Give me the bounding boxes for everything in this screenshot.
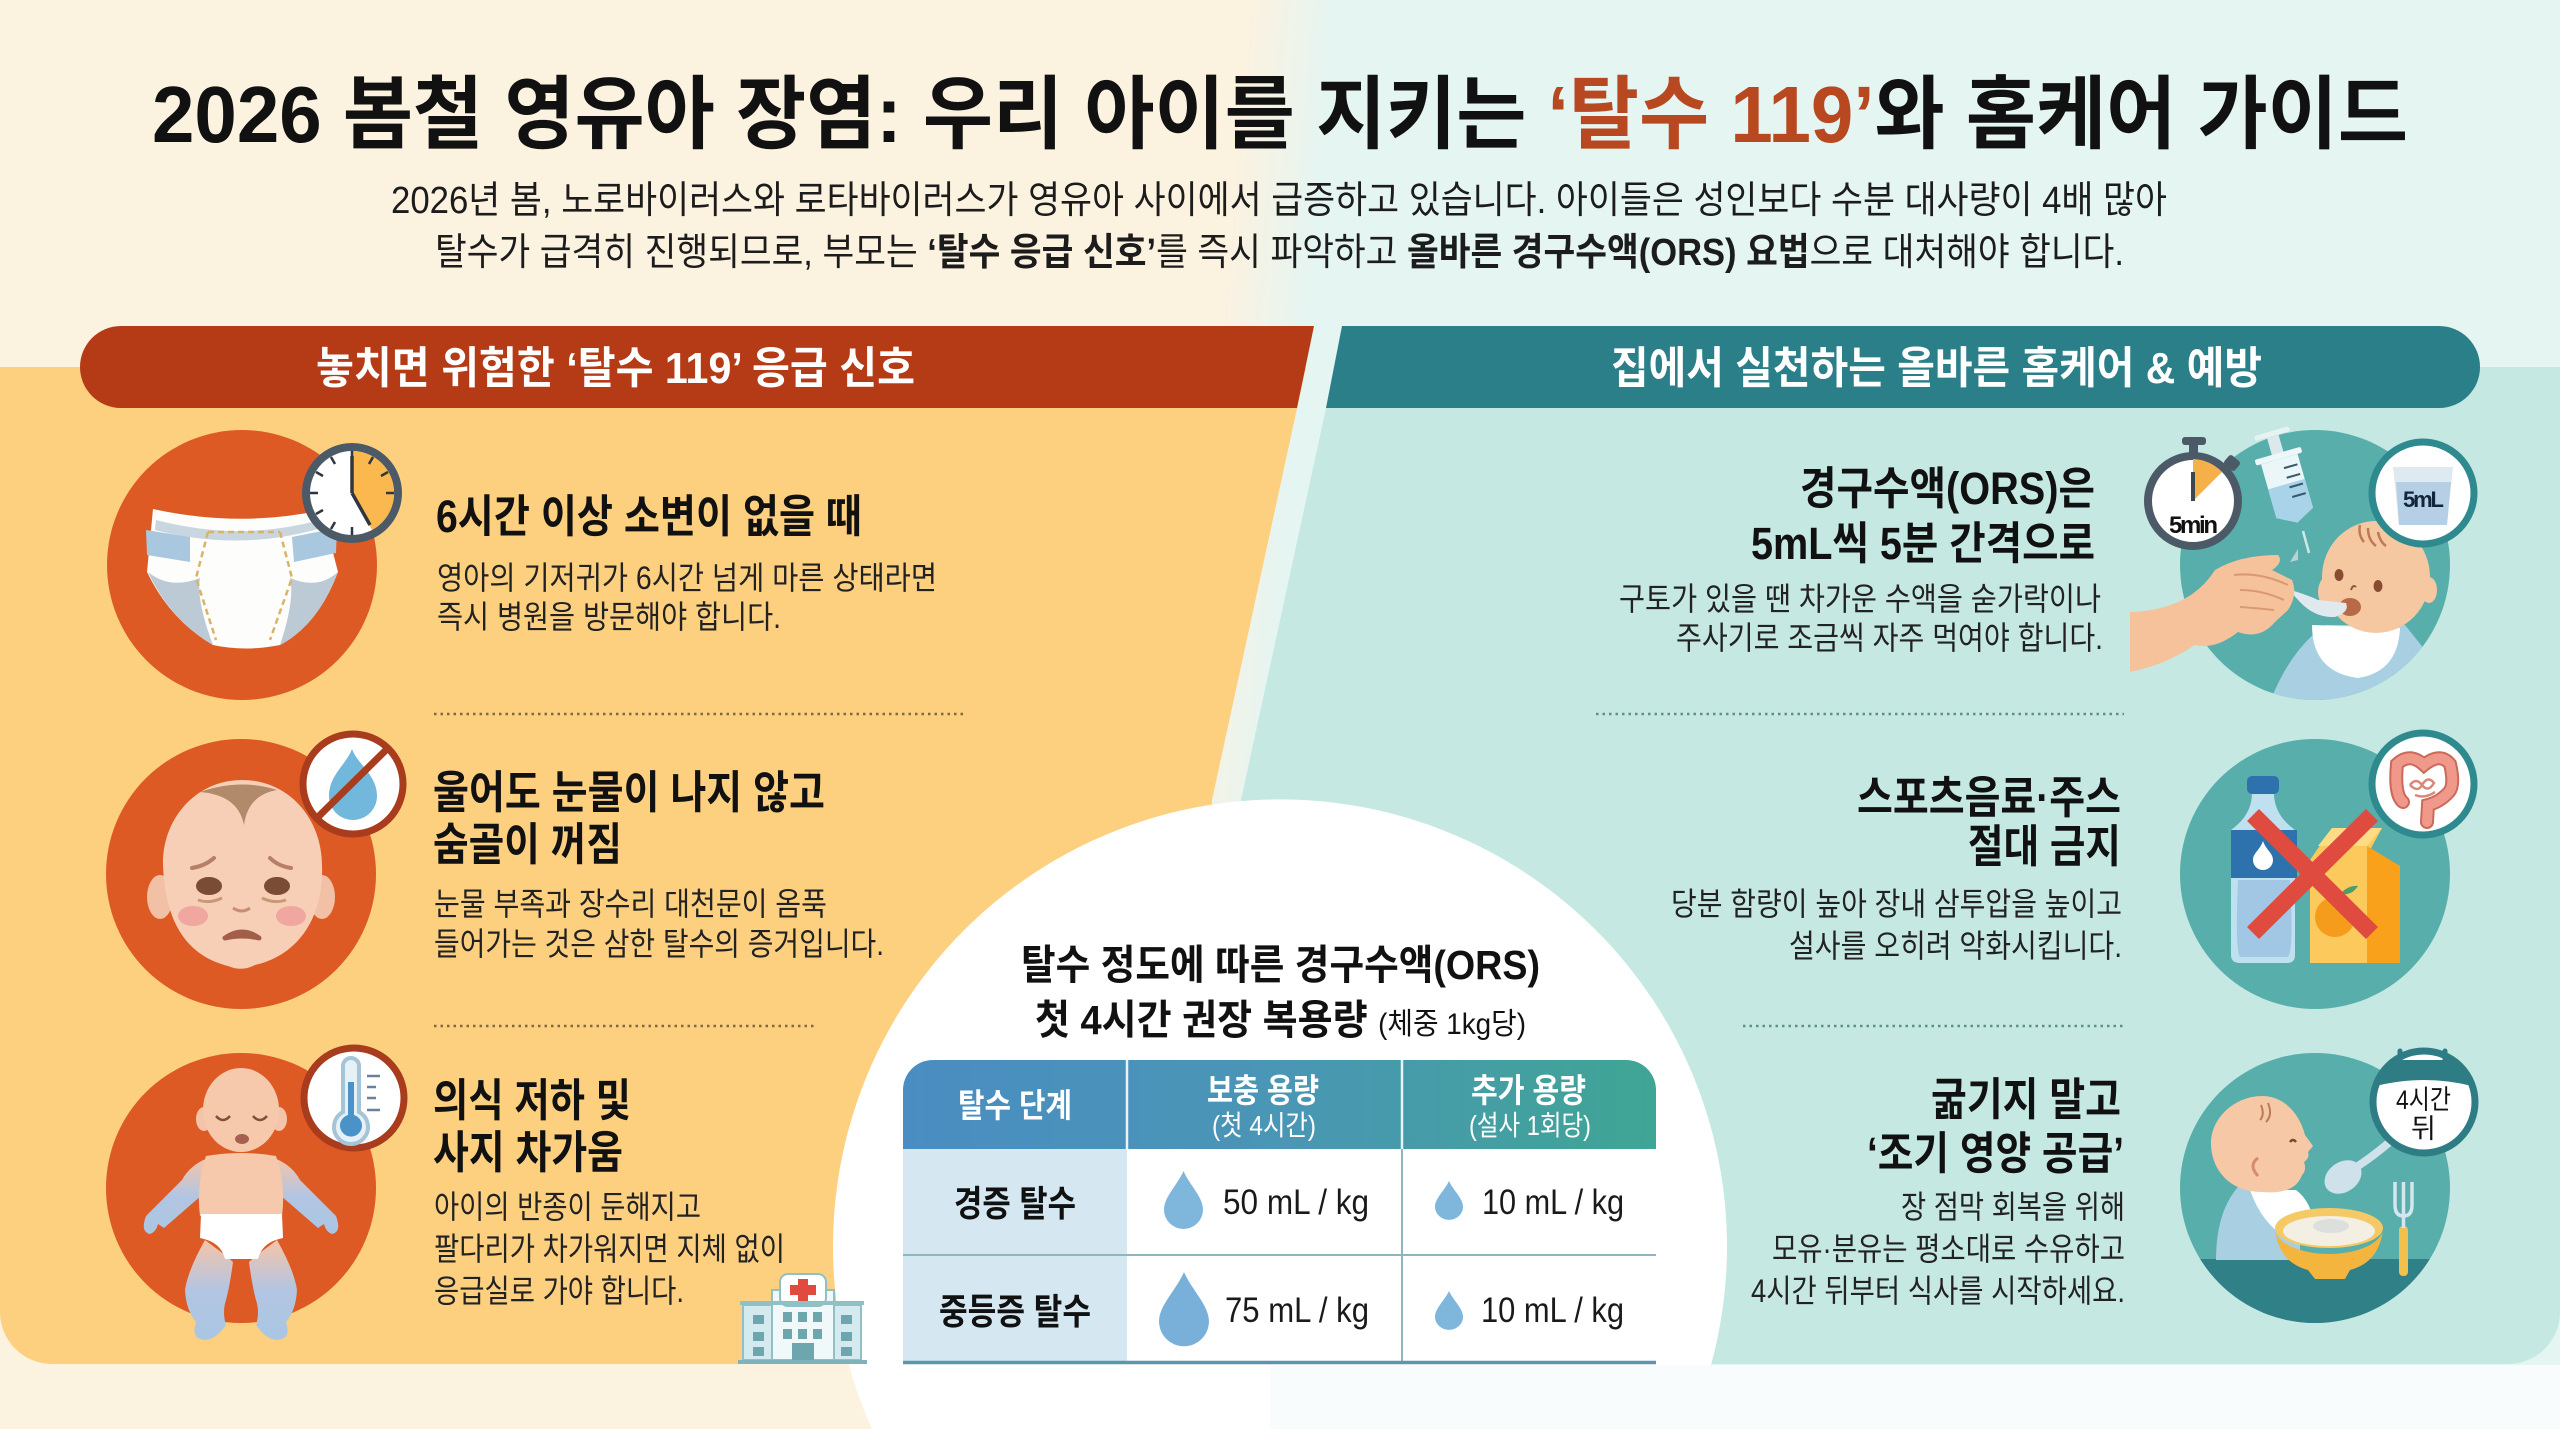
- table header row: 보충 용량: [1207, 1072, 1319, 1109]
- row: mild dehydration: 경증 탈수: [954, 1183, 1076, 1224]
- panel: danger signals: [0, 326, 1314, 1364]
- orange panel background: [0, 367, 1306, 1364]
- row: mild dehydration: 10 mL / kg: [1482, 1183, 1624, 1222]
- left section header: 놓치면 위험한 ‘탈수 119’ 응급 신호: [316, 344, 915, 393]
- heading: [1867, 1074, 2124, 1179]
- description: [434, 1189, 785, 1309]
- icon: baby eating porridge with calendar: 4시간: [2396, 1085, 2451, 1115]
- heading: 울어도 눈물이 나지 않고: [433, 767, 825, 818]
- heading: [1857, 772, 2121, 872]
- description: 4시간 뒤부터 식사를 시작하세요.: [1751, 1273, 2125, 1309]
- heading: 6시간 이상 소변이 없을 때: [436, 491, 862, 542]
- intro text: [391, 180, 2167, 274]
- table header row: 탈수 단계: [958, 1087, 1072, 1124]
- item: ORS dosing: [1619, 425, 2474, 710]
- description: 아이의 반종이 둔해지고: [434, 1189, 701, 1225]
- description: 주사기로 조금씩 자주 먹여야 합니다.: [1676, 620, 2103, 656]
- table heading: [1021, 942, 1540, 1043]
- table header row: (설사 1회당): [1469, 1110, 1591, 1141]
- description: [434, 886, 884, 962]
- heading: 경구수액(ORS)은: [1800, 463, 2095, 514]
- description: 팔다리가 차가워지면 지체 없이: [434, 1231, 785, 1267]
- panel: home care: [1241, 326, 2560, 1364]
- icon: hospital: [738, 1274, 867, 1364]
- item: early feeding: [1751, 1051, 2475, 1329]
- panel: ORS dose table: [833, 799, 2560, 1429]
- row: mild dehydration: 50 mL / kg: [1223, 1183, 1369, 1222]
- row: moderate dehydration: 중등증 탈수: [939, 1291, 1091, 1332]
- description: 즉시 병원을 방문해야 합니다.: [437, 599, 781, 635]
- icon: spoon feeding with stopwatch and cup: 5min: [2169, 512, 2218, 539]
- item: no sports drinks or juice: [1671, 733, 2474, 1009]
- right section header: [1326, 326, 2480, 408]
- description: 당분 함량이 높아 장내 삼투압을 높이고: [1671, 886, 2122, 922]
- description: 응급실로 가야 합니다.: [434, 1273, 684, 1309]
- heading: [1751, 463, 2095, 569]
- description: 구토가 있을 땐 차가운 수액을 숟가락이나: [1619, 581, 2101, 617]
- description: 영아의 기저귀가 6시간 넘게 마른 상태라면: [437, 560, 937, 596]
- description: [1671, 886, 2122, 964]
- heading: 5mL씩 5분 간격으로: [1751, 518, 2095, 569]
- dose table: [903, 1060, 1656, 1362]
- left section header: [80, 326, 1314, 408]
- heading: 절대 금지: [1968, 821, 2121, 872]
- description: 들어가는 것은 삼한 탈수의 증거입니다.: [434, 926, 884, 962]
- description: [1619, 581, 2103, 656]
- heading: 숨골이 꺼짐: [433, 819, 622, 870]
- heading: 스포츠음료·주스: [1857, 772, 2121, 823]
- white circle backdrop: [833, 799, 1727, 1429]
- row: mild dehydration: [954, 1171, 1624, 1229]
- title: 2026 봄철 영유아 장염: 우리 아이를 지키는 ‘탈수 119’와 홈케어 가이드: [152, 70, 2408, 159]
- icon: baby body with thermometer: [106, 1048, 404, 1340]
- heading: 사지 차가움: [433, 1127, 623, 1178]
- description: [1751, 1189, 2125, 1309]
- icon: spoon feeding with stopwatch and cup: [2130, 425, 2474, 710]
- icon: diaper with clock: [107, 430, 398, 700]
- intro text: 탈수가 급격히 진행되므로, 부모는 ‘탈수 응급 신호’를 즉시 파악하고 올바른 경구수액(ORS) 요법으로 대처해야 합니다.: [435, 232, 2124, 274]
- item: no tears: [106, 734, 884, 1009]
- icon: crossed bottle and juice with intestine: [2180, 733, 2474, 1009]
- heading: [433, 767, 825, 870]
- table heading: 탈수 정도에 따른 경구수액(ORS): [1021, 942, 1540, 988]
- row: moderate dehydration: 75 mL / kg: [1225, 1291, 1369, 1330]
- icon: spoon feeding with stopwatch and cup: 5mL: [2403, 487, 2444, 512]
- heading: [433, 1075, 631, 1178]
- icon: baby eating porridge with calendar: [2180, 1051, 2475, 1329]
- item: lethargy and cold limbs: [106, 1048, 785, 1340]
- description: 장 점막 회복을 위해: [1901, 1189, 2125, 1225]
- heading: 굶기지 말고: [1931, 1074, 2121, 1125]
- description: [437, 560, 937, 635]
- heading: 의식 저하 및: [433, 1075, 631, 1126]
- table header row: 추가 용량: [1471, 1072, 1586, 1109]
- row: moderate dehydration: 10 mL / kg: [1481, 1291, 1624, 1330]
- item: no urination: [107, 430, 937, 700]
- heading: ‘조기 영양 공급’: [1867, 1128, 2124, 1179]
- description: 모유·분유는 평소대로 수유하고: [1772, 1231, 2125, 1267]
- table header row: [903, 1060, 1656, 1149]
- table header row: (첫 4시간): [1212, 1110, 1316, 1141]
- teal panel background: [1241, 367, 2560, 1364]
- description: 눈물 부족과 장수리 대천문이 옴푹: [434, 886, 827, 922]
- right section header: 집에서 실천하는 올바른 홈케어 & 예방: [1611, 344, 2262, 393]
- icon: baby face with crossed drop: [106, 734, 403, 1009]
- icon: baby eating porridge with calendar: 뒤: [2411, 1114, 2436, 1144]
- row: moderate dehydration: [939, 1272, 1624, 1346]
- table heading: 첫 4시간 권장 복용량 (체중 1kg당): [1035, 997, 1526, 1043]
- description: 설사를 오히려 악화시킵니다.: [1789, 928, 2122, 964]
- intro text: 2026년 봄, 노로바이러스와 로타바이러스가 영유아 사이에서 급증하고 있습니다. 아이들은 성인보다 수분 대사량이 4배 많아: [391, 180, 2167, 222]
